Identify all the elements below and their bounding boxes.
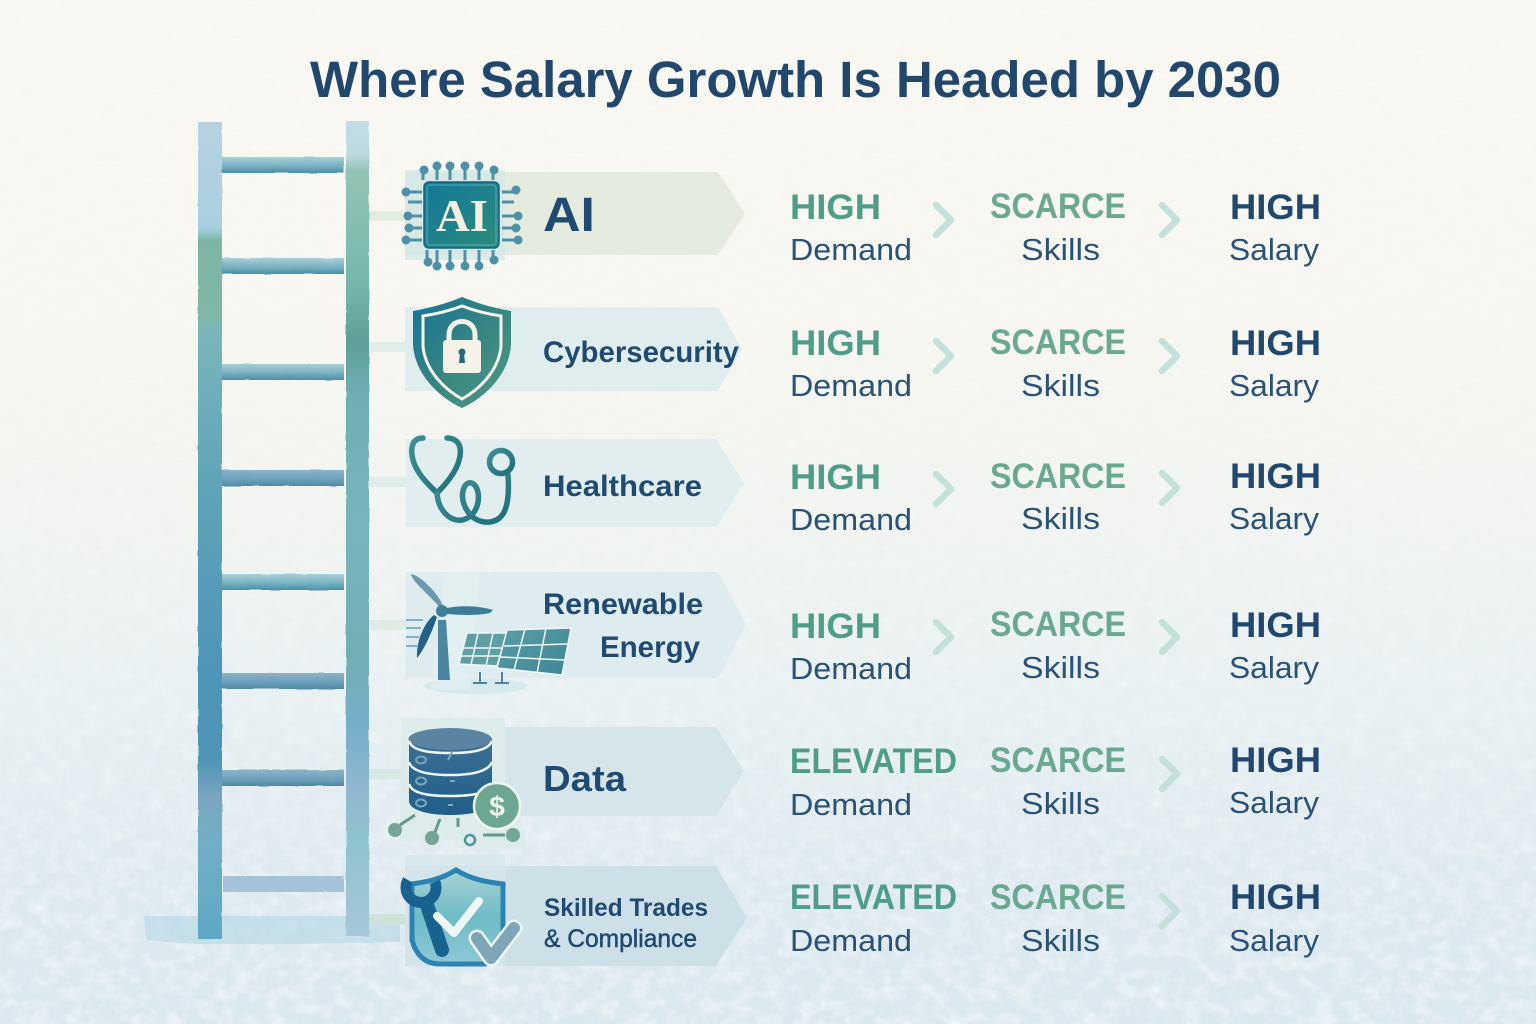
flow: Skilled Trades and Compliance xyxy=(790,878,1321,958)
background: paper wash xyxy=(0,532,1536,1024)
band: AI xyxy=(405,172,745,255)
row 2: Cybersecurity xyxy=(405,297,1321,408)
flow: Skilled Trades and Compliance: ELEVATED xyxy=(790,878,957,917)
icon: wind turbine and solar panels xyxy=(406,572,571,694)
flow: Healthcare: Demand xyxy=(790,502,912,537)
ladder ground shadow xyxy=(144,916,400,944)
flow: Healthcare: HIGH xyxy=(1230,457,1321,496)
label: Skilled Trades and Compliance: Skilled Trades xyxy=(544,894,708,922)
ladder xyxy=(144,121,407,944)
icon: shield with padlock xyxy=(413,297,511,408)
label: Healthcare: Healthcare xyxy=(543,470,702,503)
flow: Cybersecurity: Skills xyxy=(1021,368,1100,403)
label: Renewable Energy: Energy xyxy=(600,631,700,664)
flow: Renewable Energy: Demand xyxy=(790,651,912,686)
icon: AI chip xyxy=(403,163,521,269)
ladder connectors to rows xyxy=(369,211,407,925)
icon: stethoscope xyxy=(412,438,512,522)
flow: Data: Demand xyxy=(790,787,912,822)
flow: Cybersecurity: HIGH xyxy=(1230,324,1321,363)
row 6: Skilled Trades and Compliance xyxy=(405,855,1321,966)
ladder right rail xyxy=(346,121,369,936)
flow: Data: Salary xyxy=(1229,785,1320,820)
flow: Skilled Trades and Compliance: SCARCE xyxy=(990,878,1126,917)
flow: Data: HIGH xyxy=(1230,741,1321,780)
label: Renewable Energy: Renewable xyxy=(543,588,703,621)
row 4: Renewable Energy xyxy=(406,572,1321,694)
flow: Renewable Energy: SCARCE xyxy=(990,605,1126,644)
flow: AI xyxy=(790,187,1321,267)
flow: Cybersecurity: Salary xyxy=(1229,368,1320,403)
flow: Skilled Trades and Compliance: Skills xyxy=(1021,923,1100,958)
flow: AI: HIGH xyxy=(790,188,881,227)
band: Renewable Energy xyxy=(406,572,746,678)
icon: AI chip: AI xyxy=(436,190,488,241)
label: AI: AI xyxy=(543,189,595,242)
flow: Renewable Energy xyxy=(790,605,1321,686)
flow: Skilled Trades and Compliance: Salary xyxy=(1229,923,1320,958)
band: Data xyxy=(505,727,744,816)
flow: Cybersecurity: HIGH xyxy=(790,324,881,363)
label: Skilled Trades and Compliance: & Compliance xyxy=(544,925,697,953)
flow: Renewable Energy: Skills xyxy=(1021,650,1100,685)
band: Healthcare xyxy=(406,439,744,527)
ladder rungs xyxy=(222,157,344,892)
flow: AI: HIGH xyxy=(1230,188,1321,227)
flow: Healthcare: HIGH xyxy=(790,458,881,497)
band: Skilled Trades and Compliance xyxy=(405,866,747,966)
flow: Healthcare: SCARCE xyxy=(990,457,1126,496)
row 5: Data xyxy=(388,718,1321,848)
flow: Skilled Trades and Compliance: Demand xyxy=(790,923,912,958)
flow: Cybersecurity: Demand xyxy=(790,368,912,403)
flow: Renewable Energy: Salary xyxy=(1229,650,1320,685)
flow: AI: Salary xyxy=(1229,232,1320,267)
ladder left rail xyxy=(198,122,222,939)
flow: Cybersecurity xyxy=(790,323,1321,403)
flow: AI: Skills xyxy=(1021,232,1100,267)
band: Cybersecurity xyxy=(405,307,742,391)
flow: Data: SCARCE xyxy=(990,741,1126,780)
icon: database with dollar coin xyxy=(388,718,525,848)
icon: database with dollar coin: $ xyxy=(489,791,505,822)
flow: Data xyxy=(790,741,1321,822)
label: Skilled Trades and Compliance xyxy=(544,894,708,953)
icon: wrench, shield and checks xyxy=(405,855,514,966)
label: Cybersecurity: Cybersecurity xyxy=(543,336,739,369)
label: Data: Data xyxy=(543,758,627,799)
flow: Renewable Energy: HIGH xyxy=(1230,606,1321,645)
flow: Renewable Energy: HIGH xyxy=(790,607,881,646)
flow: Skilled Trades and Compliance: HIGH xyxy=(1230,878,1321,917)
flow: Data: ELEVATED xyxy=(790,742,957,781)
row 1: AI xyxy=(403,163,1321,269)
title: Where Salary Growth Is Headed by 2030 xyxy=(310,51,1281,108)
flow: Healthcare xyxy=(790,457,1321,537)
flow: Data: Skills xyxy=(1021,786,1100,821)
flow: AI: Demand xyxy=(790,232,912,267)
flow: Healthcare: Skills xyxy=(1021,501,1100,536)
flow: Cybersecurity: SCARCE xyxy=(990,323,1126,362)
flow: AI: SCARCE xyxy=(990,187,1126,226)
label: Renewable Energy xyxy=(543,588,703,664)
row 3: Healthcare xyxy=(406,438,1321,537)
flow: Healthcare: Salary xyxy=(1229,501,1320,536)
